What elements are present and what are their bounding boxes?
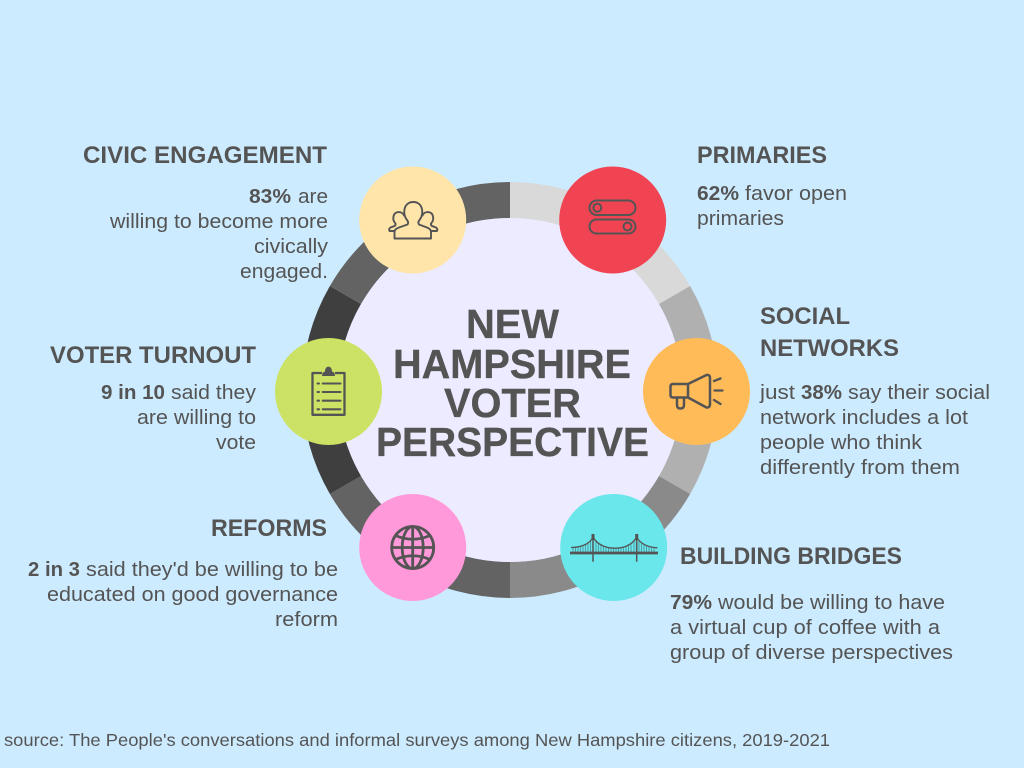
title [376,301,649,465]
panel: reforms [28,515,338,631]
heading: social networks: NETWORKS [760,335,899,362]
text: voter turnout body [101,382,256,454]
panel: primaries [697,142,847,230]
title: PERSPECTIVE [376,419,649,465]
icon: social networks megaphone [643,338,750,445]
icon: civic engagement people [359,166,466,274]
icon: voter turnout clipboard [275,338,382,445]
icon: reforms globe [359,494,466,601]
text: civic engagement body: engaged. [240,261,328,283]
text: civic engagement body: are [298,186,328,208]
panel: civic engagement [83,142,328,283]
text: building bridges body: 79% [670,592,712,614]
text: primaries body: 62% [697,183,739,205]
panel: building bridges [670,543,953,664]
text: social networks body: just [759,382,795,404]
text: reforms body: said they'd be willing to be [86,559,338,581]
text: social networks body: network includes a lot [760,407,968,429]
text: reforms body [28,559,338,631]
text: building bridges body: would be willing to have [717,592,945,614]
text: civic engagement body: willing to become more [109,211,328,233]
heading: building bridges: BUILDING BRIDGES [680,543,902,570]
text: building bridges body: a virtual cup of coffee with a [670,617,941,639]
source note: source: The People's conversations and informal surveys among New Hampshire citizens, 2019-2021 [4,730,830,750]
text: building bridges body: group of diverse perspectives [670,642,953,664]
panel: social networks [759,303,990,479]
icon: primaries toggles [559,166,666,274]
title: VOTER [444,380,581,426]
text: voter turnout body: vote [216,432,256,454]
text: reforms body: 2 in 3 [28,559,80,581]
text: building bridges body [670,592,953,664]
title: HAMPSHIRE [393,341,631,387]
panel: voter turnout [50,342,256,454]
text: primaries body [697,183,847,230]
heading: social networks [760,303,899,362]
text: social networks body [759,382,990,479]
heading: civic engagement: CIVIC ENGAGEMENT [83,142,327,169]
text: civic engagement body: 83% [249,186,291,208]
text: voter turnout body: are willing to [137,407,256,429]
text: civic engagement body: civically [254,236,328,258]
text: social networks body: differently from them [760,457,960,479]
heading: reforms: REFORMS [211,515,327,542]
heading: social networks: SOCIAL [760,303,850,330]
heading: primaries: PRIMARIES [697,142,827,169]
text: primaries body: favor open [745,183,847,205]
icon: building bridges bridge [560,494,667,601]
text: voter turnout body: 9 in 10 [101,382,165,404]
text: reforms body: educated on good governance [47,584,338,606]
text: voter turnout body: said they [171,382,256,404]
ring diagram [320,200,700,580]
text: primaries body: primaries [697,208,784,230]
heading: voter turnout: VOTER TURNOUT [50,342,256,369]
center disc [338,218,682,562]
text: social networks body: 38% [801,382,842,404]
text: reforms body: reform [275,609,338,631]
text: civic engagement body [109,186,328,283]
text: social networks body: say their social [848,382,990,404]
text: social networks body: people who think [760,432,923,454]
title: NEW [466,301,559,347]
